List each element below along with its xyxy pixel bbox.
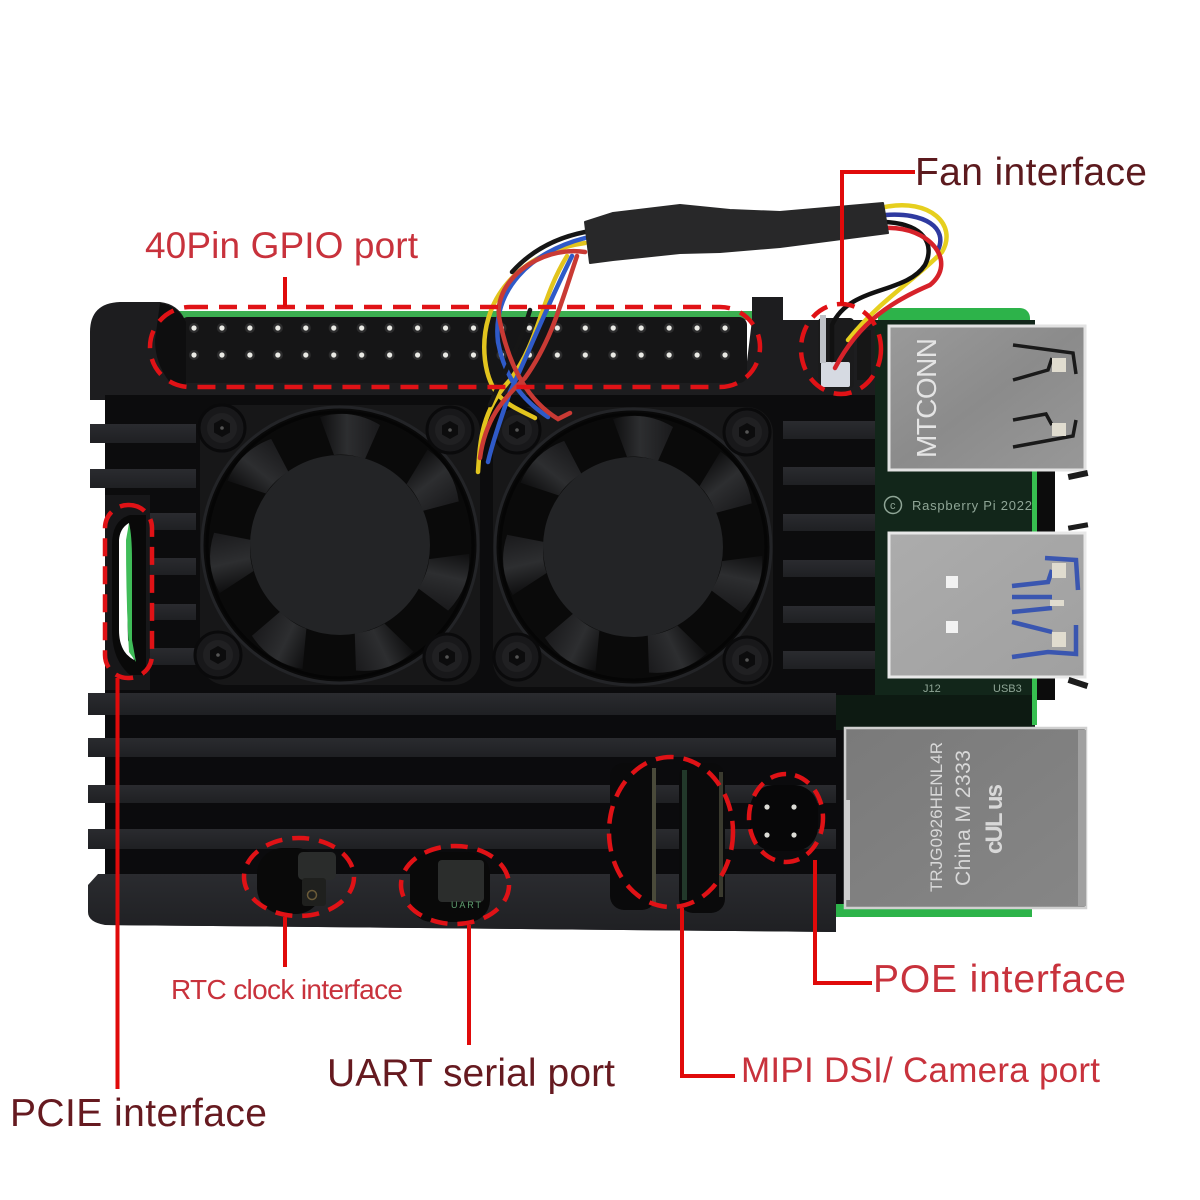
USB 2 port block: [889, 326, 1088, 480]
fan 2: [493, 407, 773, 687]
label: 40Pin GPIO port: 40Pin GPIO port: [145, 225, 419, 266]
heatsink case: [88, 297, 875, 932]
fan 1: [200, 405, 480, 685]
lower block: [105, 690, 872, 932]
PCIE slot: [112, 515, 146, 675]
board marking: J12: [923, 683, 941, 695]
heat-shrink sleeve: [585, 203, 888, 263]
board marking: [884, 496, 1032, 695]
highlight: fan interface: [801, 304, 881, 394]
GPIO header: [155, 303, 747, 385]
fan connector: [818, 315, 871, 388]
board marking: Raspberry Pi 2022: [912, 498, 1032, 513]
left fins: [90, 424, 196, 665]
upper block: [90, 297, 875, 400]
leader lines: [118, 172, 915, 1089]
label: PCIE interface: PCIE interface: [10, 1092, 267, 1135]
MIPI slots: [610, 763, 725, 913]
UART slot: [410, 852, 490, 922]
ethernet jack: [845, 728, 1086, 908]
highlight: 40Pin GPIO: [150, 307, 760, 387]
label: MIPI DSI / Camera port: MIPI DSI/ Camera port: [741, 1051, 1100, 1090]
jack markings: [927, 742, 1008, 892]
brand text: MTCONN: [911, 338, 942, 458]
label: UART serial port: UART serial port: [327, 1052, 615, 1095]
fan wires: [478, 205, 947, 472]
highlight: MIPI: [609, 757, 733, 907]
USB 3 port block: [889, 522, 1088, 689]
highlight: PCIE: [105, 505, 152, 678]
jack markings: cUL us: [981, 784, 1008, 854]
POE pins: [750, 785, 818, 851]
circuit board: [176, 308, 1055, 917]
jack markings: China M 2333: [952, 750, 975, 886]
highlight: RTC: [244, 838, 354, 916]
highlight: UART: [401, 846, 509, 924]
jack markings: TRJG0926HENL4R: [927, 742, 946, 892]
label: Fan interface: Fan interface: [915, 151, 1147, 194]
UART slot: UART: [451, 900, 482, 910]
label: RTC clock interface: RTC clock interface: [171, 974, 403, 1005]
label: POE interface: POE interface: [873, 958, 1126, 1001]
right fins: [783, 421, 875, 669]
RTC slot: [257, 848, 336, 914]
fan screws: [195, 405, 770, 683]
board marking: USB3: [993, 683, 1022, 695]
board marking: c: [890, 500, 896, 512]
highlight: POE: [749, 774, 823, 862]
